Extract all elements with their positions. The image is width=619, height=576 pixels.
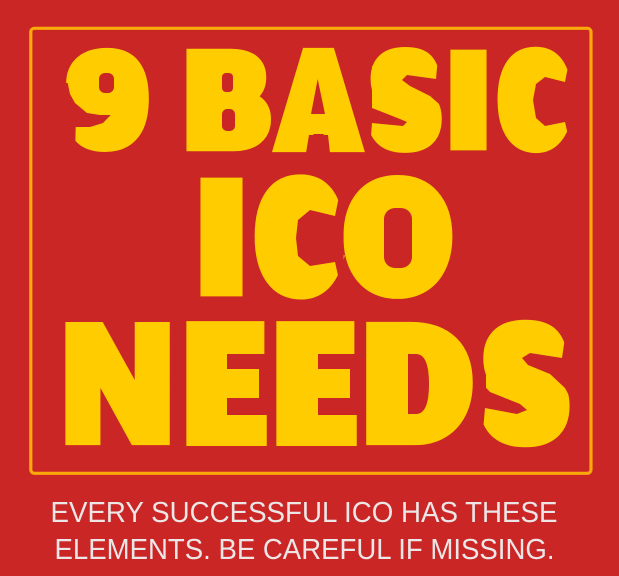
title line: 9 BASIC: 9 xyxy=(67,27,148,173)
title frame xyxy=(31,28,591,473)
title xyxy=(58,26,576,471)
title line: ICO: I xyxy=(197,153,246,322)
title line: NEEDS: S xyxy=(483,298,567,471)
title line: 9 BASIC: I xyxy=(446,27,491,173)
title line: 9 BASIC: A xyxy=(285,36,352,163)
title line: NEEDS: D xyxy=(364,297,471,471)
letter counters and notches xyxy=(58,46,576,447)
title line: NEEDS: N xyxy=(63,297,172,471)
title line: 9 BASIC: C xyxy=(499,28,568,173)
title line: 9 BASIC xyxy=(67,26,568,173)
title line: ICO: O xyxy=(345,153,451,322)
letter weight fill xyxy=(72,62,564,425)
title line: NEEDS: E xyxy=(185,298,265,471)
title line: ICO: C xyxy=(257,153,339,322)
subtitle xyxy=(50,497,558,566)
title line: NEEDS xyxy=(63,297,567,471)
subtitle line 1: EVERY SUCCESSFUL ICO HAS THESE xyxy=(50,497,558,529)
title line: NEEDS: E xyxy=(275,298,355,471)
subtitle line 2: ELEMENTS. BE CAREFUL IF MISSING. xyxy=(54,534,554,566)
title line: 9 BASIC: B xyxy=(184,26,271,173)
title line: 9 BASIC: S xyxy=(369,28,441,173)
title line: ICO xyxy=(197,153,451,322)
